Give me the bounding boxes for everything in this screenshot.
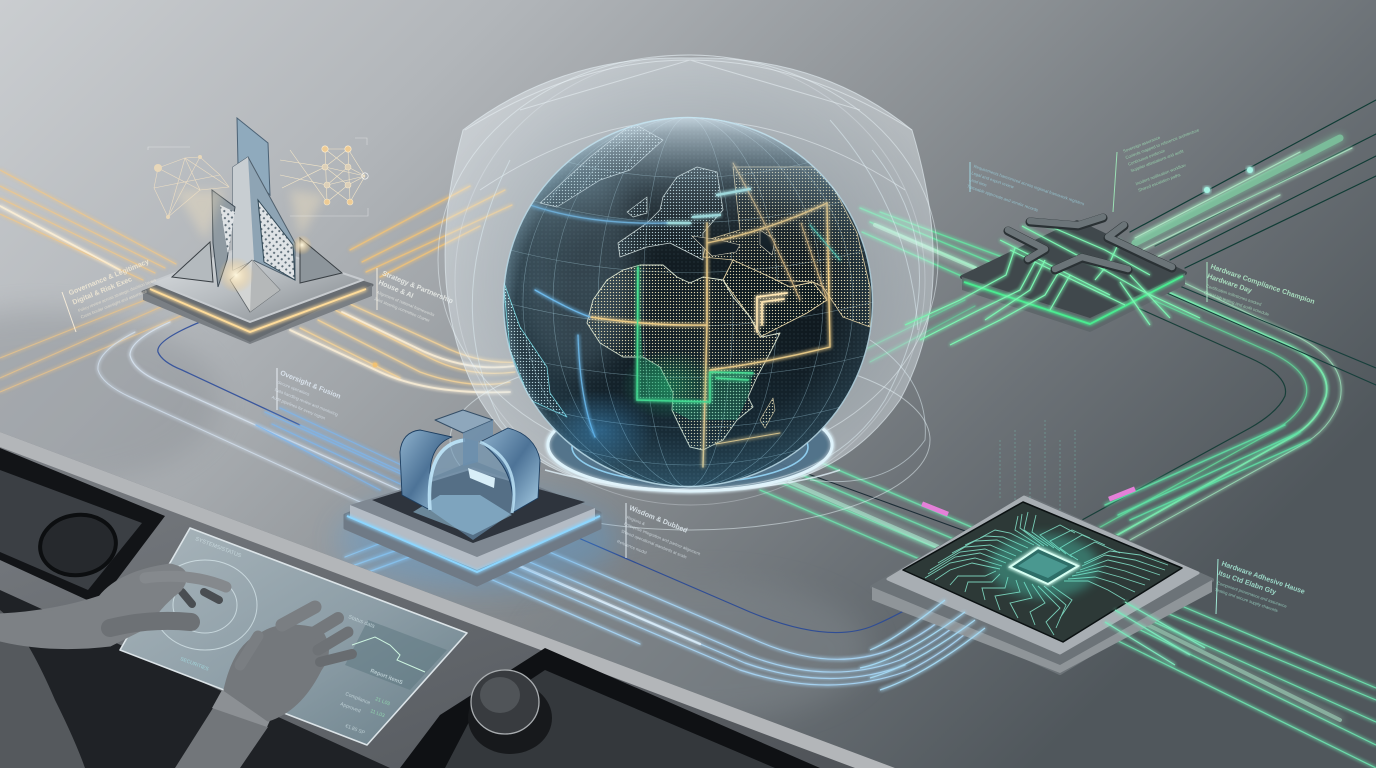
note one: Lead time (969, 177, 988, 188)
magenta markers (921, 486, 1136, 517)
label: oversight (262, 368, 346, 432)
platform base (345, 462, 600, 585)
touch panel (120, 528, 467, 745)
label: oversight: Secure operations (277, 380, 310, 397)
radar dial (153, 560, 257, 650)
chip housing (872, 497, 1212, 673)
note one: Traceable approvals and vendor records (966, 183, 1039, 213)
console body (0, 432, 895, 768)
data beams (1000, 420, 1075, 510)
note two: Continuous evidence (1127, 148, 1166, 167)
label: wisdom: Reference model (616, 539, 648, 555)
panel readouts: 11 L03 (369, 708, 386, 719)
gold data lines (0, 170, 520, 392)
icon: arches (1008, 217, 1172, 270)
label: tower right: Alignment of national frameworks (376, 290, 435, 317)
glass ribbons over globe (472, 120, 925, 490)
label: oversight: Oversight & Fusion (279, 370, 341, 401)
note one: Legal and export review (971, 170, 1015, 190)
icon: glass arch (400, 410, 540, 540)
icon: faceted tower (172, 118, 342, 312)
label: tower right: Strategy & Partnership (381, 270, 454, 305)
note three: Hardware Compliance Champion (1209, 264, 1315, 306)
panel: control console (0, 432, 895, 768)
panel readouts: 21 L03 (374, 696, 391, 707)
note two (1093, 120, 1217, 213)
note one (961, 162, 1085, 228)
label: oversight: Audit pipelines for every region (271, 394, 327, 421)
label: wisdom: Regions & (626, 515, 646, 526)
label: tower right: House & AI (377, 280, 414, 300)
chip core (989, 534, 1099, 598)
label: hardware: Testing and secure supply channels (1214, 587, 1279, 613)
panel readouts: SYSTEMS/STATUS (194, 536, 242, 559)
panel readouts: Compliance (344, 691, 371, 706)
note three: Global lab testing and audit schedule (1203, 290, 1270, 317)
panel readouts: €1.85 SP (344, 723, 366, 736)
label: hardware: Hardware Adhesive Hause (1220, 561, 1306, 596)
label: wisdom: Enterprise integration and partner alignment (623, 521, 702, 557)
globe rim (504, 118, 872, 486)
note three: Certification milestones tracked (1205, 283, 1263, 307)
icon: network right (280, 146, 368, 205)
panel: circuit chip (860, 420, 1212, 690)
note two: Shared escalation paths (1137, 172, 1181, 193)
panel readouts: Status data (347, 614, 376, 630)
panel: green arches platform (905, 217, 1200, 345)
label: tower left (48, 258, 163, 337)
label: tower left: Digital & Risk Exec (72, 276, 133, 306)
status chart (345, 620, 447, 690)
left slot with dial (0, 448, 165, 605)
label: oversight: Data handling review and monitoring (274, 387, 339, 417)
console top edge (0, 432, 895, 768)
continents (503, 123, 870, 450)
label: hardware (1199, 558, 1306, 639)
right hand (175, 607, 352, 768)
icon: network left (148, 138, 368, 219)
panel readouts: SECURITIES (179, 656, 210, 673)
operator body (0, 610, 85, 768)
left hand (0, 565, 226, 648)
label: tower left: Governance & Legitimacy (68, 258, 150, 297)
green traces under arches (905, 222, 1200, 345)
label: wisdom (607, 503, 708, 583)
label: hardware: Component provenance and assurance (1216, 580, 1288, 609)
panel readouts (179, 536, 404, 736)
note one: Requirements harmonized across regional framework registers (973, 164, 1085, 206)
panel: glass cube platform (337, 410, 617, 590)
platform base (962, 222, 1185, 332)
note two: Controls mapped to reference architecture (1125, 127, 1200, 160)
chip lower traces (860, 600, 1205, 690)
right slot with knob (400, 648, 820, 768)
panel: tower platform (143, 118, 372, 344)
globe sphere (503, 117, 873, 487)
label: tower right (362, 268, 454, 335)
green data lines (760, 100, 1376, 768)
console dark lower tray (0, 590, 390, 768)
platform base (143, 243, 372, 344)
label: tower left: Policy review across strategic decision layers (77, 277, 157, 313)
surface dot texture (503, 117, 873, 487)
note two: Incident notification workflow (1135, 162, 1187, 186)
note three (1195, 262, 1315, 335)
label: hardware: Itsu Ctd Elabn Gty (1217, 570, 1277, 596)
globe grid (503, 117, 873, 487)
note two: Sovereign assurance (1122, 135, 1161, 154)
label: green notes (961, 120, 1315, 335)
base rings (450, 350, 930, 530)
note three: Hardware Day (1206, 273, 1253, 295)
globe shading (503, 117, 873, 487)
translucent shell behind globe (438, 55, 938, 505)
glowing borders (530, 163, 840, 467)
panel readouts: Approved (339, 701, 362, 715)
label: tower right: Joint steering committee charter (373, 296, 431, 323)
chip traces (925, 512, 1168, 635)
label: tower left: Cross border oversight and assurance (80, 288, 148, 320)
panel readouts: Report itemS (369, 668, 404, 686)
blue circuit loops (98, 320, 972, 685)
label: wisdom: Shared operational standards at scale (620, 528, 688, 560)
globe (503, 117, 873, 487)
note two: Supplier attestations and audit (1130, 148, 1185, 173)
label: wisdom: Wisdom & Dubbed (628, 505, 688, 535)
